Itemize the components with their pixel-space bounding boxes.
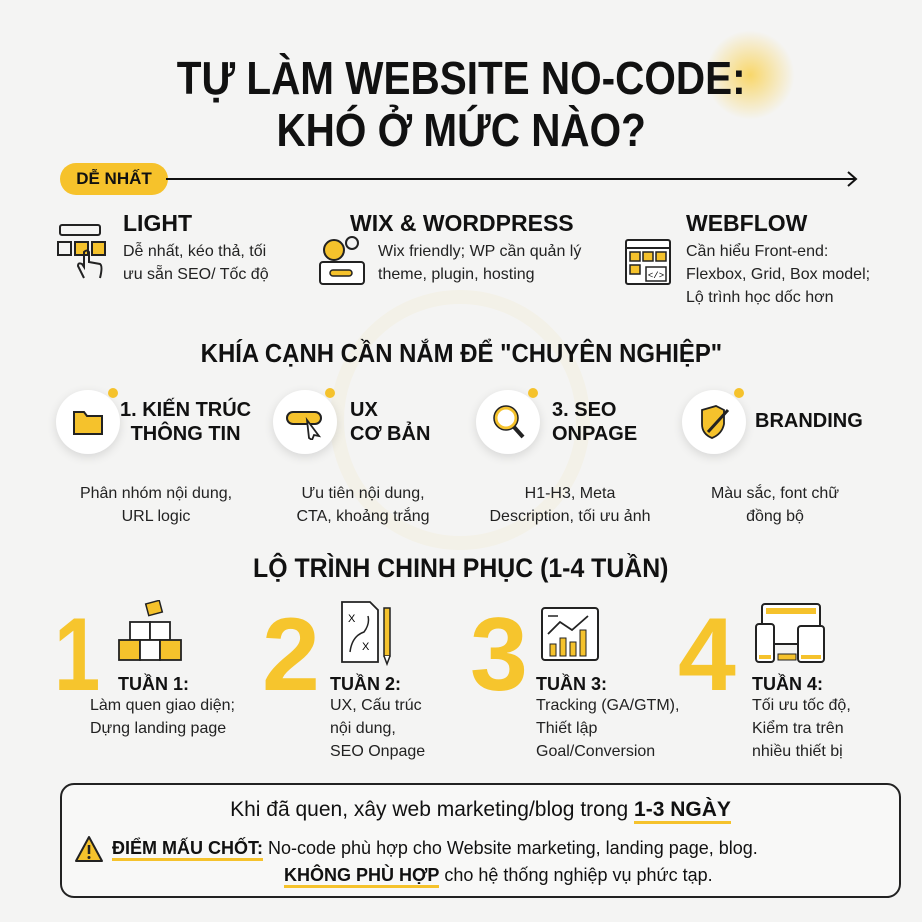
description <box>80 485 232 525</box>
label <box>552 399 637 445</box>
text: ưu sẵn SEO/ Tốc độ <box>123 266 269 283</box>
callout box <box>60 783 901 898</box>
description: Description, tối ưu ảnh <box>489 508 650 525</box>
aspect: kiến trúc <box>54 388 251 525</box>
description <box>711 484 839 525</box>
tier: wix & wordpress <box>319 210 582 285</box>
icon: folder <box>56 390 120 454</box>
icon: code layout: </> <box>648 271 664 281</box>
text: theme, plugin, hosting <box>378 266 535 283</box>
text: nội dung, <box>330 720 396 737</box>
description: Phân nhóm nội dung, <box>80 485 232 502</box>
label: TUẦN 1: <box>118 674 189 694</box>
text: Goal/Conversion <box>536 743 655 760</box>
icon: plan sheet: X <box>362 641 370 653</box>
title <box>177 52 745 156</box>
label: ONPAGE <box>552 423 637 445</box>
title: KHÓ Ở MỨC NÀO? <box>276 104 646 156</box>
number: 3 <box>470 597 528 713</box>
heading: WIX & WORDPRESS <box>350 210 574 236</box>
label: TUẦN 4: <box>752 674 823 694</box>
week 1 <box>54 597 235 737</box>
aspect: ux <box>270 388 430 525</box>
text: UX, Cấu trúc <box>330 697 422 714</box>
number: 4 <box>678 597 736 713</box>
icon: chart <box>541 607 599 661</box>
text: Wix friendly; WP cần quản lý <box>378 243 581 260</box>
icon: plan sheet: X <box>348 613 356 625</box>
text <box>752 697 851 760</box>
label <box>120 398 251 445</box>
icon: drag blocks <box>57 224 106 278</box>
arrow: difficulty axis <box>166 171 858 187</box>
label: 1. KIẾN TRÚC <box>120 399 251 421</box>
icon: warning <box>75 836 103 862</box>
icon: devices <box>755 603 825 663</box>
glow <box>705 30 795 120</box>
icon: gears <box>319 236 365 285</box>
title: TỰ LÀM WEBSITE NO-CODE: <box>177 52 745 104</box>
pill: dễ nhất: DỄ NHẤT <box>76 169 152 188</box>
label: CƠ BẢN <box>350 423 430 445</box>
label: TUẦN 3: <box>536 674 607 694</box>
watermark logo <box>330 290 590 550</box>
icon: magnifier <box>476 390 540 454</box>
aspect: seo <box>474 388 650 525</box>
description <box>489 485 650 525</box>
text: SEO Onpage <box>330 743 425 760</box>
text: Dễ nhất, kéo thả, tối <box>123 243 266 260</box>
pill: dễ nhất <box>60 163 168 195</box>
text: Thiết lập <box>536 720 597 737</box>
text: Làm quen giao diện; <box>90 697 235 714</box>
description: đồng bộ <box>746 508 804 525</box>
text: Tracking (GA/GTM), <box>536 697 679 714</box>
text: Kiểm tra trên <box>752 720 844 737</box>
label: TUẦN 2: <box>330 674 401 694</box>
aspect: branding <box>680 388 863 525</box>
text <box>330 697 425 760</box>
week 4 <box>678 597 851 760</box>
icon: blocks <box>118 600 182 661</box>
text <box>123 242 269 283</box>
text: Flexbox, Grid, Box model; <box>686 266 870 283</box>
description: Màu sắc, font chữ <box>711 485 839 502</box>
week 3 <box>470 597 679 760</box>
heading: WEBFLOW <box>686 210 807 236</box>
number: 2 <box>262 597 320 713</box>
headline: Khi đã quen, xây web marketing/blog trong 1-3 NGÀY <box>230 798 731 821</box>
week 2 <box>262 597 425 760</box>
description: CTA, khoảng trắng <box>296 508 430 525</box>
label <box>350 399 430 445</box>
text <box>90 697 235 737</box>
text: Tối ưu tốc độ, <box>752 697 851 714</box>
text <box>686 243 870 306</box>
text <box>378 243 582 283</box>
description: Ưu tiên nội dung, <box>301 485 425 502</box>
key point line 2: KHÔNG PHÙ HỢP cho hệ thống nghiệp vụ phức tạp. <box>284 865 713 885</box>
text <box>536 697 679 760</box>
tier: light <box>57 210 269 283</box>
label: BRANDING <box>755 410 863 432</box>
icon: brush shield <box>682 390 746 454</box>
label: UX <box>350 399 378 421</box>
text: Dựng landing page <box>90 720 226 737</box>
text: Lộ trình học dốc hơn <box>686 289 833 306</box>
icon: cursor button <box>273 390 337 454</box>
label: THÔNG TIN <box>131 423 241 445</box>
label: 3. SEO <box>552 399 616 421</box>
key point: ĐIỂM MẤU CHỐT: No-code phù hợp cho Website marketing, landing page, blog. <box>112 838 758 858</box>
text: Cần hiểu Front-end: <box>686 243 828 260</box>
icon: code layout <box>625 239 671 285</box>
description <box>296 485 430 525</box>
description: URL logic <box>122 508 190 525</box>
tier: webflow <box>625 210 870 306</box>
number: 1 <box>54 597 100 713</box>
heading: khía cạnh: KHÍA CẠNH CẦN NẮM ĐỂ "CHUYÊN NGHIỆP" <box>200 338 722 368</box>
heading: LIGHT <box>123 210 192 236</box>
heading: lộ trình: LỘ TRÌNH CHINH PHỤC (1-4 TUẦN) <box>253 553 669 583</box>
description: H1-H3, Meta <box>525 485 615 502</box>
text: nhiều thiết bị <box>752 743 843 760</box>
icon: plan sheet <box>341 601 391 666</box>
